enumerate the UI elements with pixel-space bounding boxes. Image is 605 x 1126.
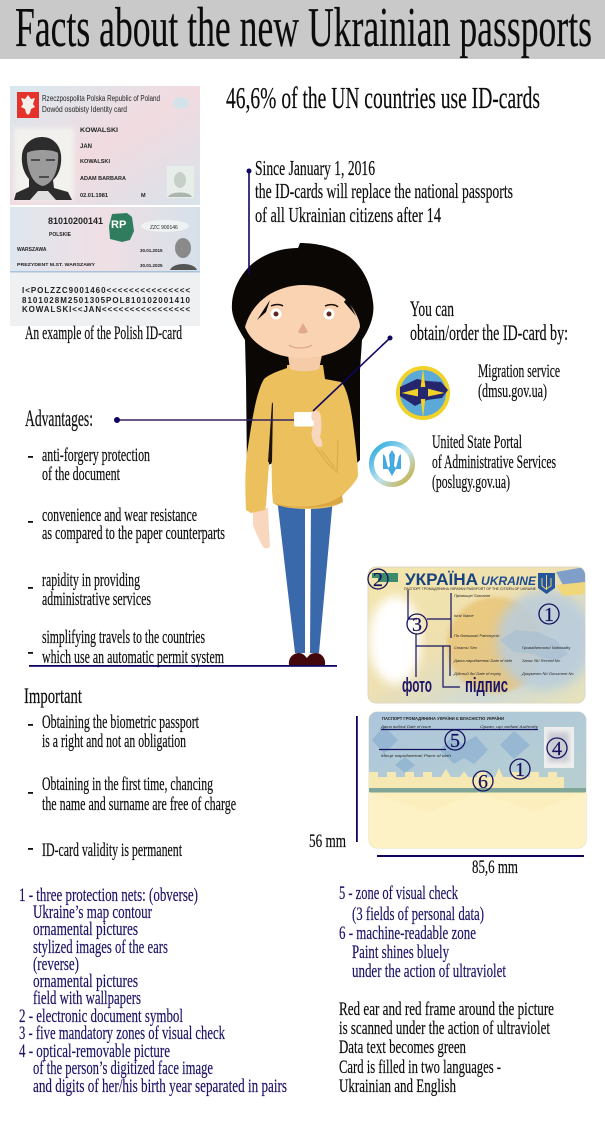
ukrainian ID-card back: Орган, що видав/ Authority — [480, 725, 539, 729]
polish card back: 8101028M2501305POL810102001410 — [22, 296, 191, 305]
callout numbers — [368, 569, 559, 634]
dimension: height: 56 mm — [309, 832, 346, 852]
legend: numbers 5-6: under the action of ultraviolet — [352, 961, 506, 982]
ukrainian ID-card front: Дійсний до/ Date of expiry — [453, 671, 502, 676]
nose and mouth — [298, 323, 308, 334]
polish ID-card image — [10, 86, 200, 326]
ID-card in hand — [294, 412, 314, 426]
ukrainian ID-card back: 5 — [450, 730, 460, 752]
polish card front: Rzeczpospolita Polska Republic of Poland — [42, 94, 160, 103]
ukrainian ID-card front: 2 — [373, 569, 383, 591]
polish card back: WARSZAWA — [17, 247, 47, 253]
legend: numbers 5-6: Paint shines bluely — [352, 942, 449, 963]
icon: migration service emblem — [396, 366, 450, 420]
face — [245, 285, 360, 358]
polish card back: PREZYDENT M.ST. WARSZAWY — [17, 262, 96, 268]
ukrainian ID-card back: Місце народження/ Place of birth — [381, 754, 451, 758]
important list: ID-card validity is permanent — [42, 841, 183, 861]
ukrainian ID-card front: ПАСПОРТ ГРОМАДЯНИНА УКРАЇНИ/ PASSPORT OF THE CITIZEN OF UKRAINE — [404, 587, 537, 591]
advantages list — [28, 446, 225, 668]
important list: is a right and not an obligation — [42, 732, 186, 752]
migration service text: (dmsu.gov.ua) — [478, 382, 547, 402]
ukrainian ID-card front: Документ №/ Document No — [521, 671, 574, 676]
ultraviolet notes: Ukrainian and English — [339, 1076, 456, 1097]
legend: numbers 5-6 — [339, 883, 506, 982]
polish card front: 02.01.1981 — [80, 193, 108, 199]
advantages list: convenience and wear resistance — [42, 506, 197, 526]
polish card front: KOWALSKI — [80, 159, 110, 165]
ukrainian ID-card back: ПАСПОРТ ГРОМАДЯНИНА УКРАЇНИ Є ВЛАСНІСТЮ УКРАЇНИ — [382, 715, 504, 721]
ukrainian ID-card back: 6 — [478, 771, 488, 793]
polish card back: KOWALSKI<<JAN<<<<<<<<<<<<<<<< — [22, 305, 190, 314]
legend: numbers 1-4: ornamental pictures — [33, 971, 138, 992]
legend: numbers 1-4: of the person’s digitized face image — [33, 1058, 213, 1079]
right hand — [311, 411, 322, 447]
ultraviolet notes — [339, 999, 554, 1097]
dimension: width: 85,6 mm — [472, 858, 518, 878]
legend: numbers 1-4: 2 - electronic document symbol — [19, 1006, 183, 1027]
ultraviolet notes: Data text becomes green — [339, 1037, 466, 1058]
advantages list: as compared to the paper counterparts — [42, 524, 225, 544]
legend: numbers 5-6: 5 - zone of visual check — [339, 883, 458, 904]
legend: numbers 1-4 — [19, 885, 287, 1097]
ukrainian ID-card front: По батькові/ Patronymic — [454, 633, 499, 638]
pointer: introduction — [246, 168, 252, 275]
legs — [277, 498, 333, 653]
state portal text: (poslugy.gov.ua) — [432, 473, 510, 493]
advantages heading: Advantages: — [25, 406, 93, 431]
legend: numbers 1-4: stylized images of the ears — [33, 937, 168, 958]
polish card back: 30.01.2015 — [140, 248, 163, 253]
polish card front: Dowód osobisty Identity card — [42, 105, 127, 114]
ukrainian ID-card back: 1 — [515, 759, 525, 781]
migration service text — [478, 362, 560, 402]
advantages list: administrative services — [42, 590, 151, 610]
sweater — [245, 365, 358, 513]
ultraviolet notes: Card is filled in two languages - — [339, 1057, 501, 1078]
advantages list: simplifying travels to the countries — [42, 628, 205, 648]
introduction text: Since January 1, 2016 — [255, 156, 375, 180]
state portal text — [432, 433, 556, 493]
legend: numbers 1-4: and digits of her/his birth year separated in pairs — [33, 1076, 287, 1097]
ukrainian ID-card front: Ім'я/ Name — [454, 613, 474, 618]
polish card front: KOWALSKI — [80, 127, 118, 134]
important list — [28, 713, 236, 861]
ukrainian ID-card back: 4 — [552, 738, 562, 760]
callout lines — [408, 590, 460, 687]
ukrainian ID-card front: Громадянство/ Nationality — [522, 645, 571, 650]
advantages list: which use an automatic permit system — [42, 648, 224, 668]
polish card front: M — [141, 193, 146, 199]
introduction text — [255, 156, 513, 227]
polish card front: ADAM BARBARA — [80, 176, 126, 182]
polish card back: ZZC 900146 — [150, 225, 178, 231]
ukrainian ID-card front: 1 — [544, 604, 554, 626]
polish card front: JAN — [80, 144, 92, 150]
callout lines — [379, 730, 538, 750]
advantages list: rapidity in providing — [42, 571, 140, 591]
character: girl with ID-card — [232, 243, 373, 665]
legend: numbers 1-4: 3 - five mandatory zones of visual check — [19, 1023, 225, 1044]
ukrainian ID-card front: Дата народження/ Date of birth — [453, 658, 513, 663]
important list: Obtaining the biometric passport — [42, 713, 200, 733]
photo and signature labels: фото — [402, 675, 432, 697]
hair — [232, 243, 373, 471]
ukrainian ID-card back — [369, 712, 586, 848]
legend: numbers 1-4: (reverse) — [33, 954, 79, 975]
introduction text: of all Ukrainian citizens after 14 — [255, 203, 441, 227]
neck — [288, 355, 322, 371]
legend: numbers 1-4: field with wallpapers — [33, 988, 141, 1009]
advantages list: of the document — [42, 465, 121, 485]
legend: numbers 1-4: Ukraine’s map contour — [33, 902, 152, 923]
important heading: Important — [24, 683, 82, 708]
legend: numbers 1-4: 1 - three protection nets: (obverse) — [19, 885, 198, 906]
legend: numbers 5-6: 6 - machine-readable zone — [339, 923, 476, 944]
polish card back: 30.01.2025 — [140, 263, 163, 268]
polish card front — [10, 86, 200, 205]
shoes — [289, 653, 325, 665]
ukrainian ID-card front: 3 — [412, 614, 422, 636]
ukrainian ID-card front: УКРАЇНА — [405, 570, 478, 589]
ukrainian ID-card front: UKRAINE — [481, 574, 537, 588]
important list: the name and surname are free of charge — [42, 795, 236, 815]
ukrainian ID-card front — [368, 567, 593, 703]
legend: numbers 1-4: 4 - optical-removable picture — [19, 1041, 170, 1062]
state portal text: United State Portal — [432, 433, 522, 453]
pointer: advantages — [114, 417, 294, 423]
obtain heading: You can — [410, 296, 454, 321]
polish card caption: An example of the Polish ID-card — [25, 324, 182, 344]
ukrainian ID-card front: Запис №/ Record No — [522, 658, 561, 663]
callout numbers — [445, 730, 567, 791]
pointer: how to obtain — [313, 336, 392, 411]
dimension: height — [309, 716, 358, 852]
polish card back: POLSKIE — [49, 232, 72, 238]
polish card back: I<POLZZC9001460<<<<<<<<<<<<<<< — [22, 286, 190, 295]
ukrainian ID-card front: Прізвище/ Surname — [454, 593, 491, 598]
legend: numbers 5-6: (3 fields of personal data) — [352, 904, 484, 925]
eyes — [271, 304, 283, 306]
polish card back — [10, 207, 200, 326]
left hand — [253, 508, 270, 548]
important list: Obtaining in the first time, chancing — [42, 775, 213, 795]
icon: state portal trident — [372, 444, 412, 484]
ukrainian ID-card back: Дата видачі/ Date of issue — [380, 725, 431, 729]
polish card back: 81010200141 — [48, 216, 103, 226]
ukrainian ID-card front: Стать/ Sex — [454, 645, 478, 650]
ukrainian ID-card front: підпис — [465, 675, 508, 697]
obtain heading — [410, 296, 568, 345]
advantages list: anti-forgery protection — [42, 446, 150, 466]
polish card back: RP — [111, 219, 126, 231]
legend: numbers 1-4: ornamental pictures — [33, 919, 138, 940]
ground line — [29, 665, 337, 667]
